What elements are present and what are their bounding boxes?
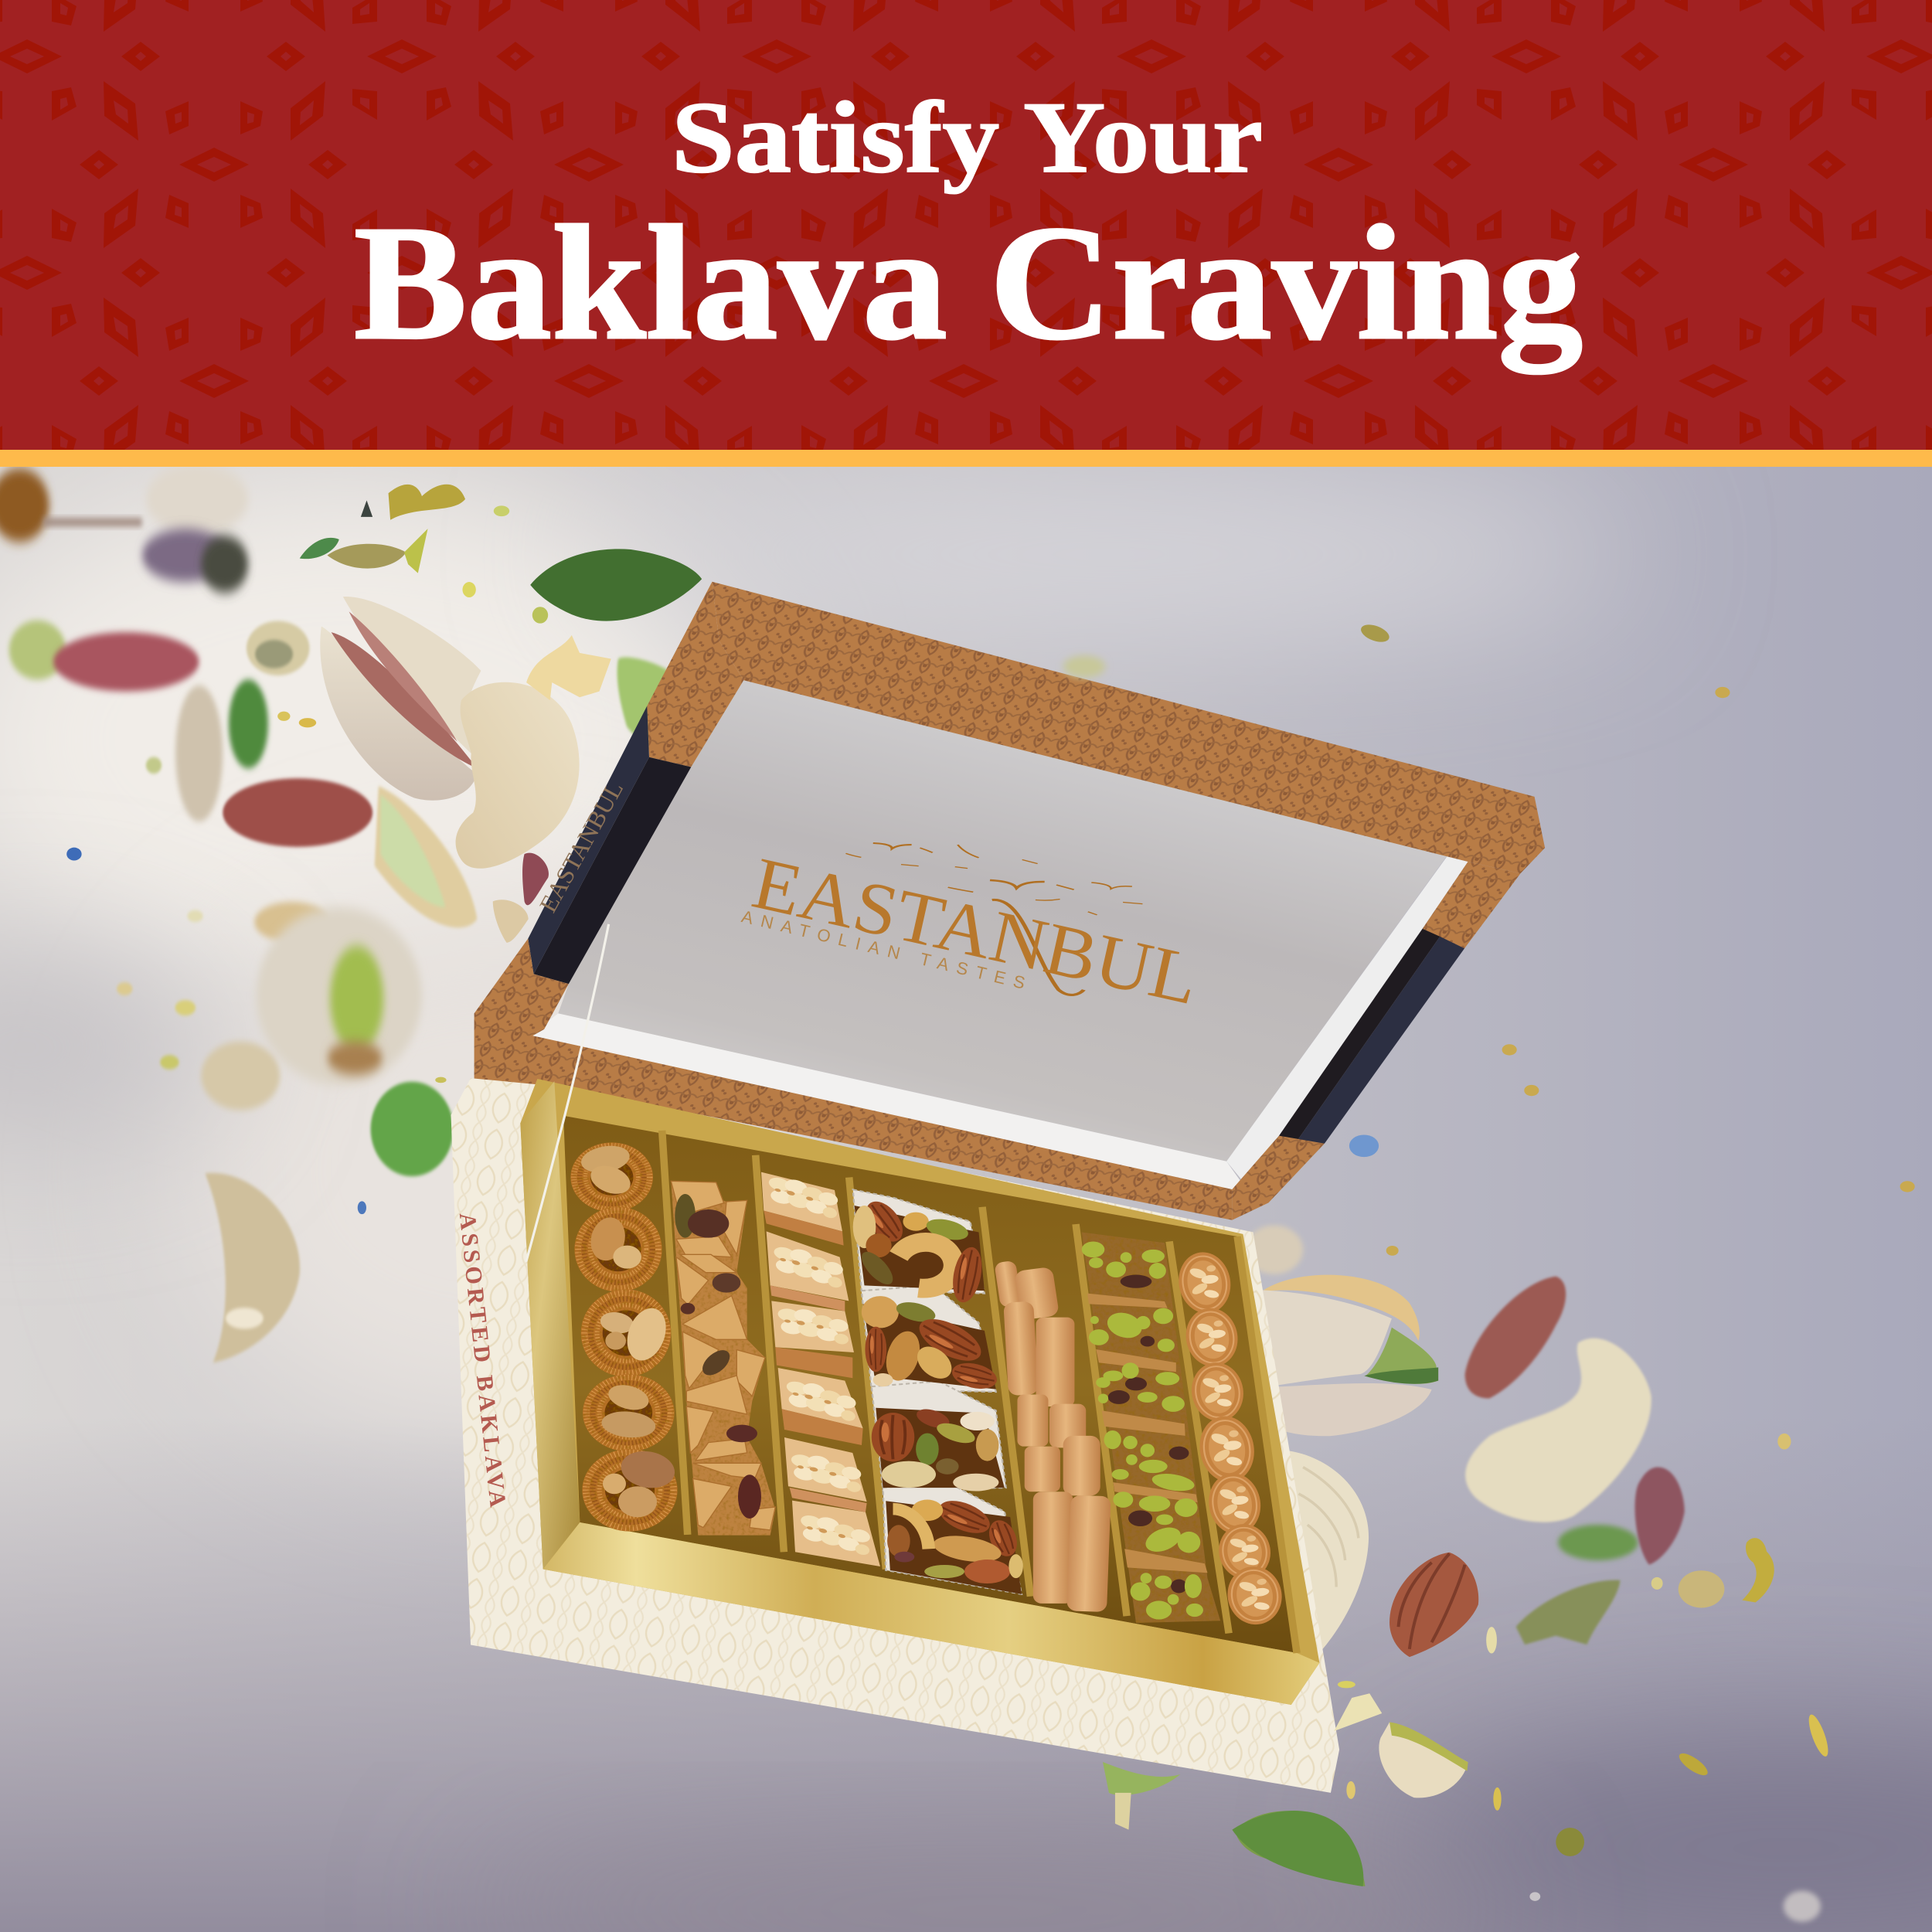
pistachio shard <box>327 544 406 569</box>
blurred dark green nut <box>201 536 248 593</box>
blurred green <box>1558 1525 1638 1560</box>
large bottom leaf <box>1232 1811 1363 1886</box>
nut stem <box>1115 1793 1131 1830</box>
tray front flap <box>543 1522 1319 1705</box>
pistachio crumb <box>1679 1570 1724 1607</box>
blurred cream pistachio <box>375 786 477 927</box>
pistachio squares <box>1082 1232 1220 1623</box>
nut rolls <box>1175 1249 1286 1628</box>
bottom leaf <box>1236 1811 1365 1886</box>
pistachio upper kernel skin <box>349 611 457 742</box>
pistachio piece green edge <box>1389 1723 1468 1771</box>
blurred brown nut top left <box>0 468 49 542</box>
lid right rim lower <box>1232 1136 1325 1220</box>
pastries, right half <box>853 1189 1286 1628</box>
cluster 2 <box>862 1296 1000 1393</box>
brand logo text on the lid <box>534 777 1206 1020</box>
lid left rim upper <box>647 582 743 767</box>
base of the box <box>451 1078 1339 1793</box>
logo swash on N <box>992 900 1083 995</box>
blurred streak <box>43 518 142 526</box>
ribbon string <box>526 924 609 1262</box>
sharp almond <box>1389 1553 1478 1657</box>
large pistachio brown edge <box>327 1042 383 1075</box>
title line 1: Satisfy Your <box>672 80 1263 194</box>
crumbs upper right <box>1063 621 1915 1256</box>
blurred green fragment <box>9 621 66 679</box>
title <box>354 80 1583 374</box>
pistachio lower shell <box>320 626 477 801</box>
pistachio lower shell <box>1263 1383 1432 1436</box>
large pistachio green centre <box>330 946 383 1052</box>
tiny crumbs <box>66 500 548 1214</box>
lid front rim <box>519 1035 1232 1220</box>
right spine navy <box>1297 937 1464 1144</box>
blurred cup inner <box>255 640 293 668</box>
blurred red pistachio <box>53 632 199 692</box>
pistachio green face <box>380 795 446 907</box>
cream chip <box>254 902 329 942</box>
pistachio kernel stripe <box>1364 1367 1438 1384</box>
blurred chip <box>201 1042 280 1110</box>
pistachio kernel skin <box>332 632 477 768</box>
green leaf under box <box>1103 1762 1180 1795</box>
cream nut fragment <box>526 635 611 700</box>
lid right rim upper <box>1423 862 1520 948</box>
blurred nut cream top <box>146 464 248 535</box>
cluster 4 <box>887 1495 1023 1583</box>
ring fragment <box>389 485 465 520</box>
ridged shell <box>1272 1450 1369 1651</box>
yellow leaf shard <box>404 529 428 573</box>
blurred cream cup <box>247 621 310 675</box>
spine outer navy <box>528 706 649 974</box>
blurred crescent nut <box>205 1173 300 1362</box>
paper cups <box>853 1189 1022 1594</box>
blurred red nut <box>223 778 372 847</box>
spine wordmark: EASTANBUL <box>534 777 628 917</box>
pastries, left half <box>570 1142 880 1566</box>
blurred nut <box>1245 1226 1303 1274</box>
cluster 1 <box>853 1196 986 1304</box>
spine inner dark <box>534 757 691 984</box>
floating nuts and leaves on the left <box>0 464 702 1362</box>
almond grooves <box>1399 1553 1465 1649</box>
lid left rim lower <box>474 938 569 1084</box>
pistachio body <box>1245 1290 1392 1387</box>
cluster 3 <box>872 1406 998 1492</box>
gold tray <box>520 1079 1319 1705</box>
large blurred pistachio shell <box>257 907 422 1085</box>
side label: ASSORTED BAKLAVA <box>454 1212 512 1509</box>
white inner edge <box>1226 856 1468 1187</box>
blurred pistachio shard <box>1516 1580 1621 1645</box>
blurred cashew <box>1465 1338 1651 1522</box>
pistachio upper shell <box>343 597 481 753</box>
tray left flap <box>520 1081 580 1570</box>
EASTANBUL wordmark: EASTANBUL <box>746 842 1206 1020</box>
cream pistachio piece <box>1379 1723 1468 1798</box>
pistachio upper shell <box>1261 1275 1420 1341</box>
folded baklava <box>671 1181 775 1536</box>
tray dividers <box>662 1131 1297 1653</box>
blurred red pistachio <box>1635 1467 1685 1565</box>
pistachio green kernel <box>1365 1328 1438 1384</box>
cream chip <box>1334 1693 1382 1731</box>
foreground items under the box <box>1063 621 1915 1886</box>
blurred almond <box>1465 1277 1566 1399</box>
orange divider band <box>0 450 1932 467</box>
ANATOLIAN TASTES tagline: ANATOLIAN TASTES <box>740 906 1027 993</box>
nuts behind spine <box>493 900 529 943</box>
blurred purple nut <box>142 529 229 582</box>
small green leaf <box>300 538 339 559</box>
green fragment right <box>617 658 682 747</box>
title line 2: Baklava Craving <box>354 192 1583 374</box>
right side nuts behind the box <box>1245 1226 1438 1651</box>
foreground nuts and crumbs on the right <box>1236 1277 1832 1922</box>
white lower lining <box>530 1013 1247 1191</box>
red header banner <box>0 0 1932 450</box>
lid of the box <box>474 582 1545 1220</box>
tray interior <box>563 1116 1297 1653</box>
right spine dark <box>1279 929 1440 1141</box>
crispy caramel bars <box>761 1172 880 1566</box>
shell ridges <box>1298 1467 1359 1587</box>
crescent highlight <box>226 1308 264 1329</box>
tray rim <box>520 1079 1319 1705</box>
yellow shard <box>1742 1538 1774 1603</box>
green blurred leaf <box>371 1082 454 1176</box>
mixed nut clusters <box>853 1189 1023 1594</box>
lid top rim <box>712 582 1545 873</box>
red nut behind spine <box>522 853 549 905</box>
nut cluster bases <box>855 1206 1022 1594</box>
blurred cream shell <box>175 685 223 821</box>
kataifi nests <box>570 1142 678 1532</box>
large sharp green leaf <box>530 549 702 621</box>
lid inner panel <box>558 680 1447 1162</box>
photo background <box>0 456 1932 1932</box>
sharp cashew <box>456 682 580 869</box>
rolled fingers <box>994 1260 1111 1612</box>
lid gold birds <box>845 843 1142 915</box>
small crumbs <box>1338 1434 1832 1922</box>
blurred green leaf <box>229 679 268 768</box>
